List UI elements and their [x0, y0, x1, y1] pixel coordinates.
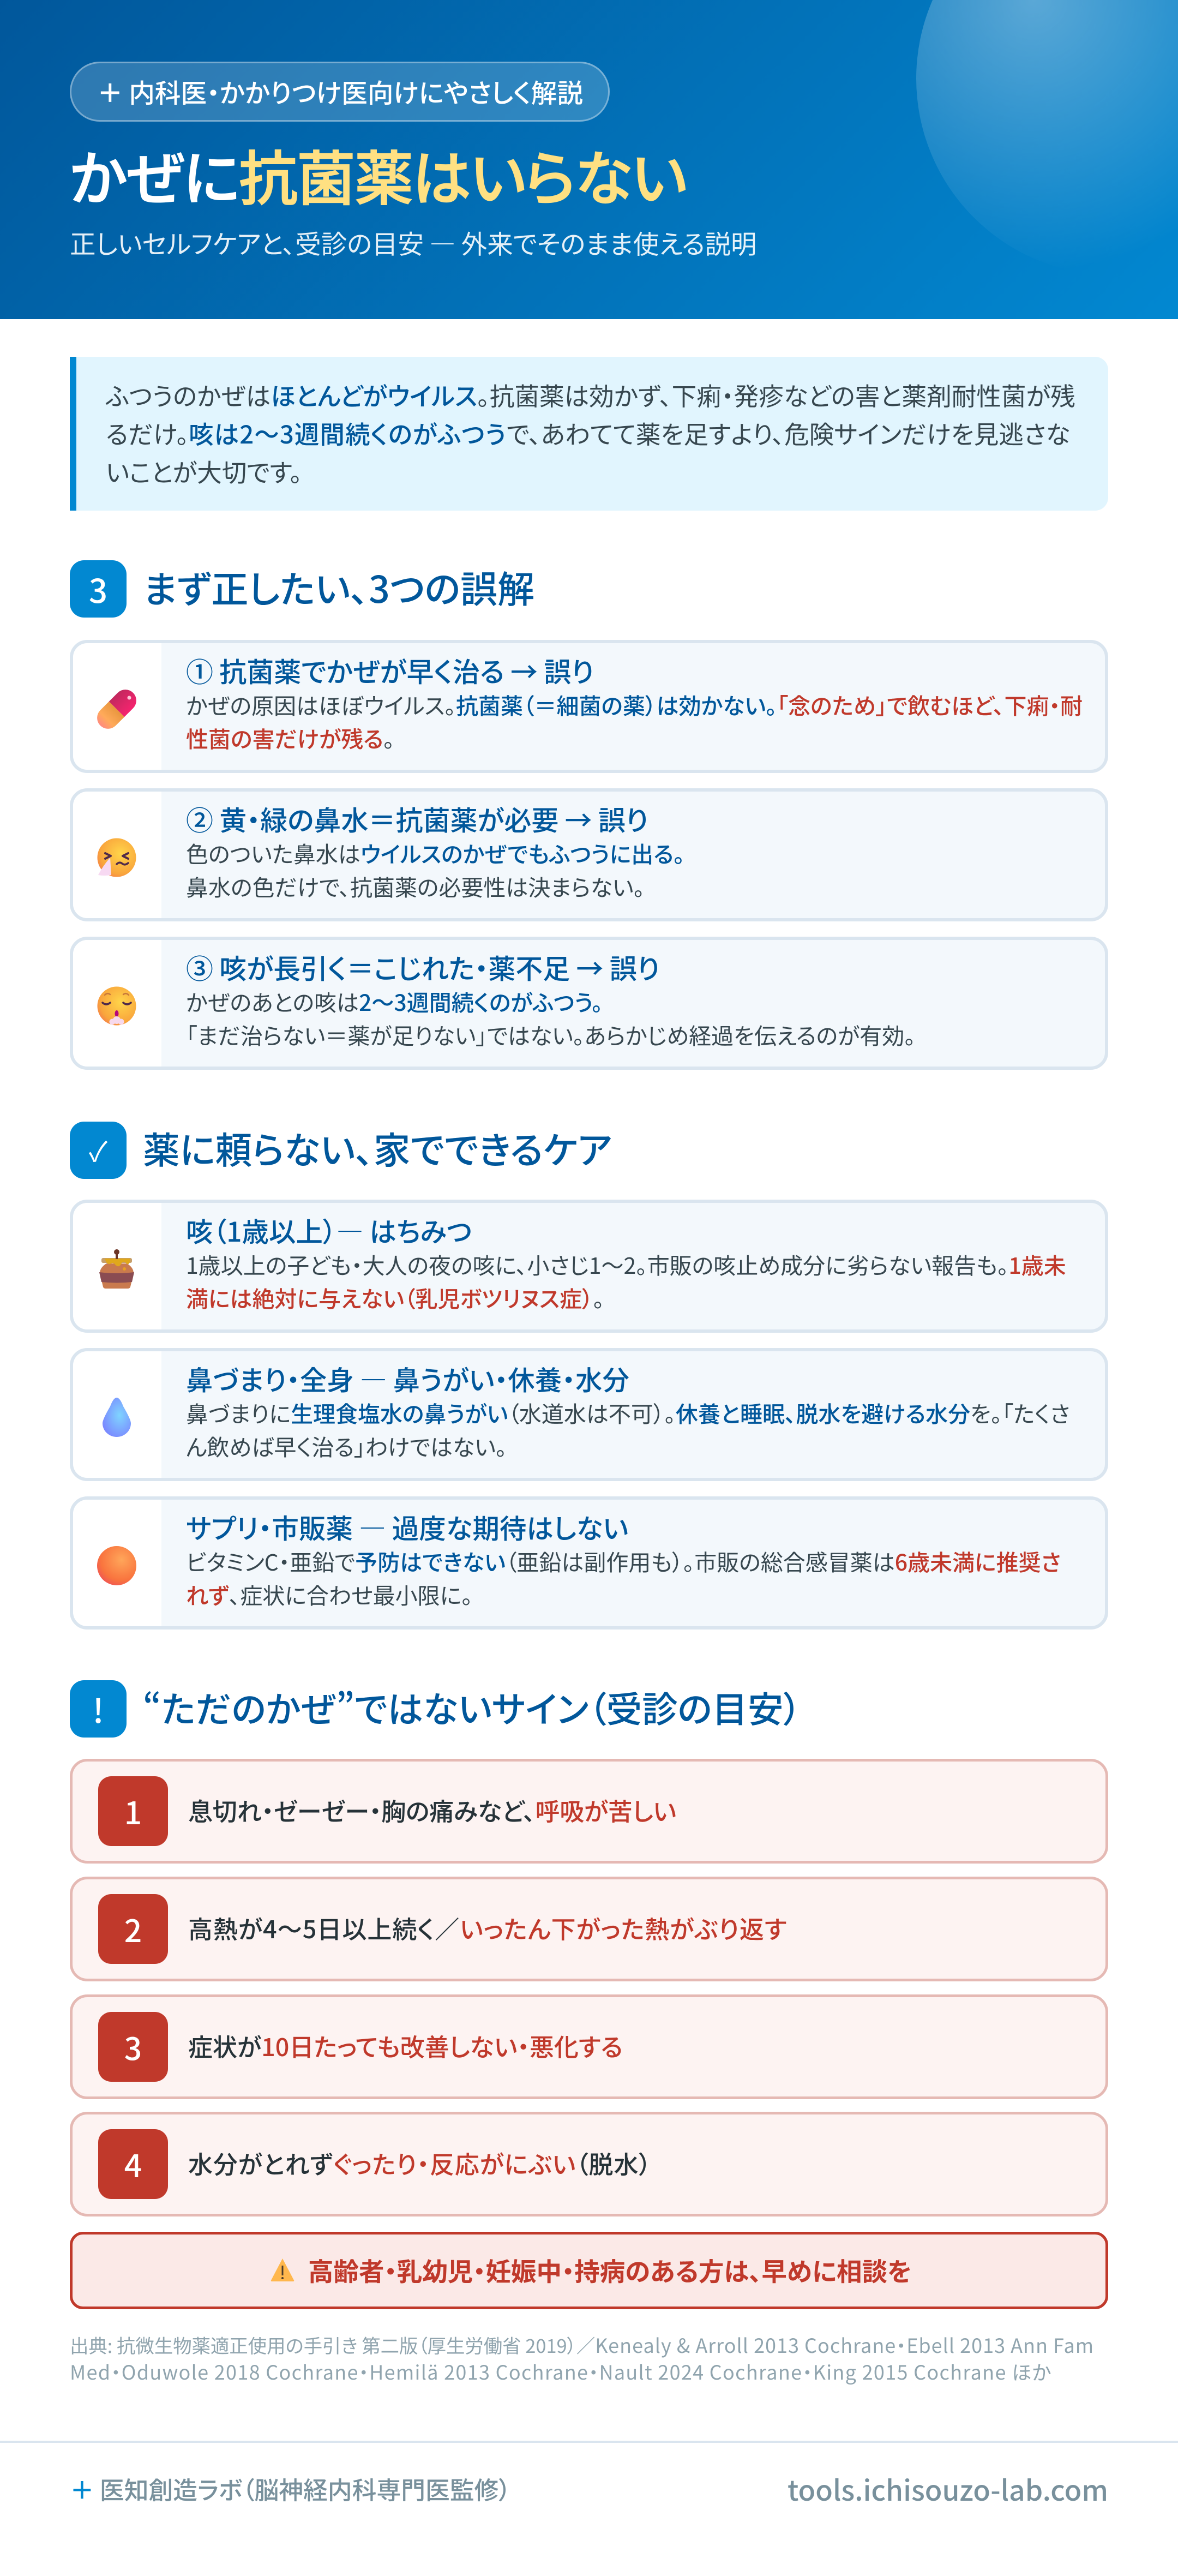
card body: 満には絶対に与えない（乳児ボツリヌス症）。 — [186, 1281, 604, 1314]
card body — [186, 688, 1083, 754]
number 2 — [98, 1894, 168, 1964]
audience pill — [70, 62, 610, 122]
warning row 2 — [70, 1877, 1108, 1981]
section badge: check — [70, 1122, 127, 1179]
text: 高熱が4〜5日以上続く／いったん下がった熱がぶり返す — [188, 1910, 788, 1945]
card body: 「まだ治らない＝薬が足りない」ではない。あらかじめ経過を伝えるのが有効。 — [186, 1018, 916, 1051]
card body: 性菌の害だけが残る。 — [186, 721, 394, 754]
section badge: 3 — [70, 560, 127, 618]
card body: ビタミンC・亜鉛で予防はできない（亜鉛は副作用も）。市販の総合感冒薬は6歳未満に推奨さ — [186, 1544, 1061, 1577]
high-risk callout — [70, 2232, 1108, 2309]
card title: 鼻づまり・全身 — 鼻うがい・休養・水分 — [186, 1359, 629, 1398]
number 3 — [98, 2012, 168, 2082]
intro callout — [70, 357, 1108, 511]
card: misconception 1 — [70, 640, 1108, 773]
intro callout: るだけ。咳は2〜3週間続くのがふつうで、あわてて薬を足すより、危険サインだけを見逃さな — [106, 415, 1070, 451]
icon: orange — [97, 1546, 136, 1585]
card body: 色のついた鼻水はウイルスのかぜでもふつうに出る。 — [186, 836, 685, 869]
number 2: 2 — [124, 1907, 142, 1951]
section heading: misconceptions: まず正したい、3つの誤解 — [143, 560, 534, 614]
card body — [186, 985, 916, 1051]
card body — [186, 1396, 1070, 1462]
warning row 3 — [70, 1994, 1108, 2099]
card title: ③ 咳が長引く＝こじれた・薬不足 → 誤り — [186, 948, 659, 987]
icon: face exhaling — [97, 986, 136, 1026]
card title: サプリ・市販薬 — 過度な期待はしない — [186, 1508, 628, 1547]
icon: warning triangle — [271, 2259, 294, 2281]
icon: honey pot — [99, 1249, 134, 1289]
card body — [186, 1544, 1061, 1610]
card body: かぜの原因はほぼウイルス。抗菌薬（＝細菌の薬）は効かない。「念のため」で飲むほど、下痢・耐 — [186, 688, 1083, 721]
card title: ② 黄・緑の鼻水＝抗菌薬が必要 → 誤り — [186, 799, 648, 838]
icon: sneezing face — [97, 838, 136, 877]
audience pill: ＋ 内科医・かかりつけ医向けにやさしく解説 — [97, 73, 583, 110]
icon: water drop — [103, 1398, 131, 1437]
footer: lab name: ＋ 医知創造ラボ（脳神経内科専門医監修） — [70, 2471, 511, 2506]
text: 水分がとれずぐったり・反応がにぶい（脱水） — [188, 2145, 652, 2180]
warning row 4 — [70, 2112, 1108, 2216]
card body: 鼻水の色だけで、抗菌薬の必要性は決まらない。 — [186, 870, 645, 902]
callout text: 高齢者・乳幼児・妊娠中・持病のある方は、早めに相談を — [308, 2252, 912, 2289]
footer divider — [0, 2441, 1178, 2443]
decorative circle — [916, 0, 1178, 275]
card body: 1歳以上の子ども・大人の夜の咳に、小さじ1〜2。市販の咳止め成分に劣らない報告も。1歳未 — [186, 1248, 1066, 1280]
card: honey — [70, 1200, 1108, 1333]
text: 症状が10日たっても改善しない・悪化する — [188, 2028, 623, 2063]
sources: Med・Oduwole 2018 Cochrane・Hemilä 2013 Cochrane・Nault 2024 Cochrane・King 2015 Cochrane ほか — [70, 2357, 1051, 2386]
card body: 鼻づまりに生理食塩水の鼻うがい（水道水は不可）。休養と睡眠、脱水を避ける水分を。「たくさ — [186, 1396, 1070, 1429]
card title: ① 抗菌薬でかぜが早く治る → 誤り — [186, 651, 594, 690]
number 1 — [98, 1776, 168, 1846]
card body — [186, 1248, 1066, 1314]
section badge: exclamation — [70, 1680, 127, 1738]
section heading: warning signs: “ただのかぜ”ではないサイン（受診の目安） — [143, 1681, 801, 1733]
card body: れず、症状に合わせ最小限に。 — [186, 1578, 473, 1610]
text: 息切れ・ゼーゼー・胸の痛みなど、呼吸が苦しい — [188, 1792, 676, 1828]
card body — [186, 836, 685, 902]
intro callout: ふつうのかぜはほとんどがウイルス。抗菌薬は効かず、下痢・発疹などの害と薬剤耐性菌が残 — [106, 377, 1075, 413]
section badge: check: ✓ — [89, 1130, 107, 1170]
number 4: 4 — [124, 2142, 142, 2186]
sources: 出典: 抗微生物薬適正使用の手引き 第二版（厚生労働省 2019）／Kenealy & Arroll 2013 Cochrane・Ebell 2013 Ann Fam — [70, 2331, 1094, 2359]
subtitle: 正しいセルフケアと、受診の目安 — 外来でそのまま使える説明 — [70, 224, 757, 261]
intro callout: いことが大切です。 — [106, 453, 302, 489]
card: misconception 2 — [70, 788, 1108, 921]
sources — [70, 2331, 1094, 2386]
card: supplements — [70, 1496, 1108, 1630]
title: かぜに抗菌薬はいらない — [70, 132, 686, 217]
number 4 — [98, 2129, 168, 2199]
header banner — [0, 0, 1178, 319]
number 1: 1 — [124, 1789, 142, 1834]
warning row 1 — [70, 1759, 1108, 1864]
card title: 咳（1歳以上）— はちみつ — [186, 1211, 472, 1250]
card: nasal care — [70, 1348, 1108, 1481]
section badge: exclamation: ! — [93, 1685, 104, 1733]
footer: url: tools.ichisouzo-lab.com — [788, 2468, 1108, 2509]
icon: pill — [97, 690, 136, 729]
number 3: 3 — [124, 2024, 142, 2069]
section heading: home care: 薬に頼らない、家でできるケア — [143, 1122, 612, 1175]
card: misconception 3 — [70, 937, 1108, 1070]
card body: ん飲めば早く治る」わけではない。 — [186, 1429, 507, 1462]
section badge: 3: 3 — [89, 565, 107, 613]
card body: かぜのあとの咳は2〜3週間続くのがふつう。 — [186, 985, 603, 1017]
